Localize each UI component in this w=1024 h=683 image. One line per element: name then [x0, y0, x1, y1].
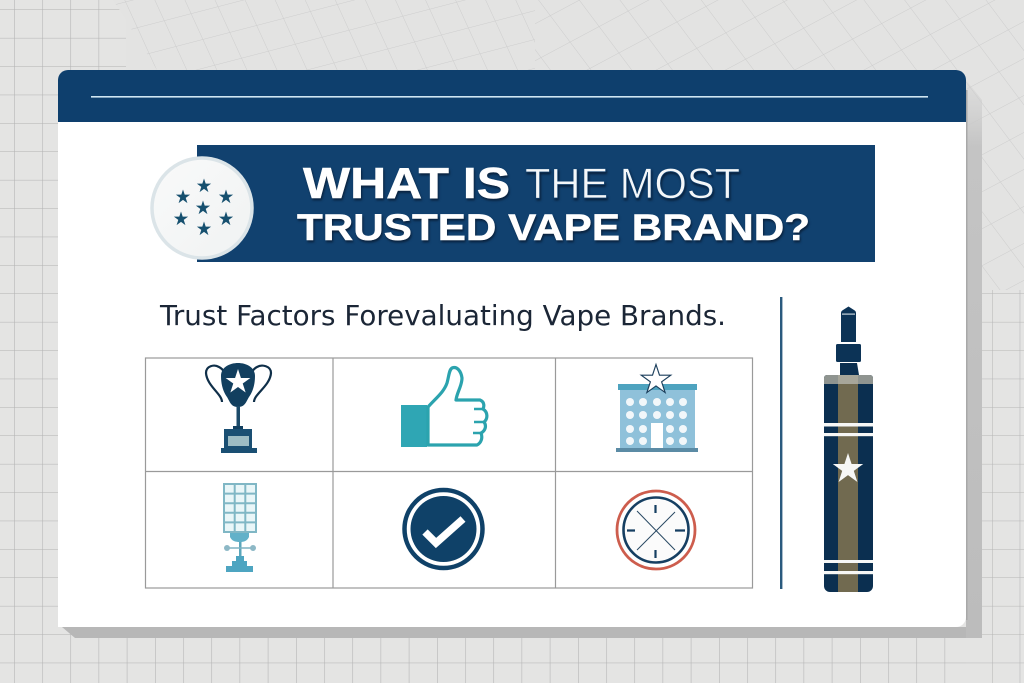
icon: check badge	[404, 490, 482, 568]
icon: clock dial	[617, 491, 695, 569]
icon: grid tower	[224, 484, 256, 572]
title line one	[303, 159, 740, 208]
icon: vape pen	[824, 306, 873, 592]
title line one: WHAT IS	[303, 159, 510, 208]
icon: star badge	[152, 158, 252, 258]
subtitle: Trust Factors Forevaluating Vape Brands.	[159, 300, 726, 332]
header bar	[58, 70, 966, 122]
icon: trophy	[206, 363, 271, 453]
title line two: TRUSTED VAPE BRAND?	[297, 207, 810, 248]
vertical divider	[780, 297, 782, 589]
main card	[58, 70, 966, 627]
trust factor table grid	[146, 358, 752, 588]
icon: building with star	[616, 364, 698, 452]
card drop shadow	[62, 80, 982, 638]
icon: thumbs up	[401, 368, 487, 447]
title line one: THE MOST	[525, 160, 740, 208]
title banner	[197, 145, 875, 262]
